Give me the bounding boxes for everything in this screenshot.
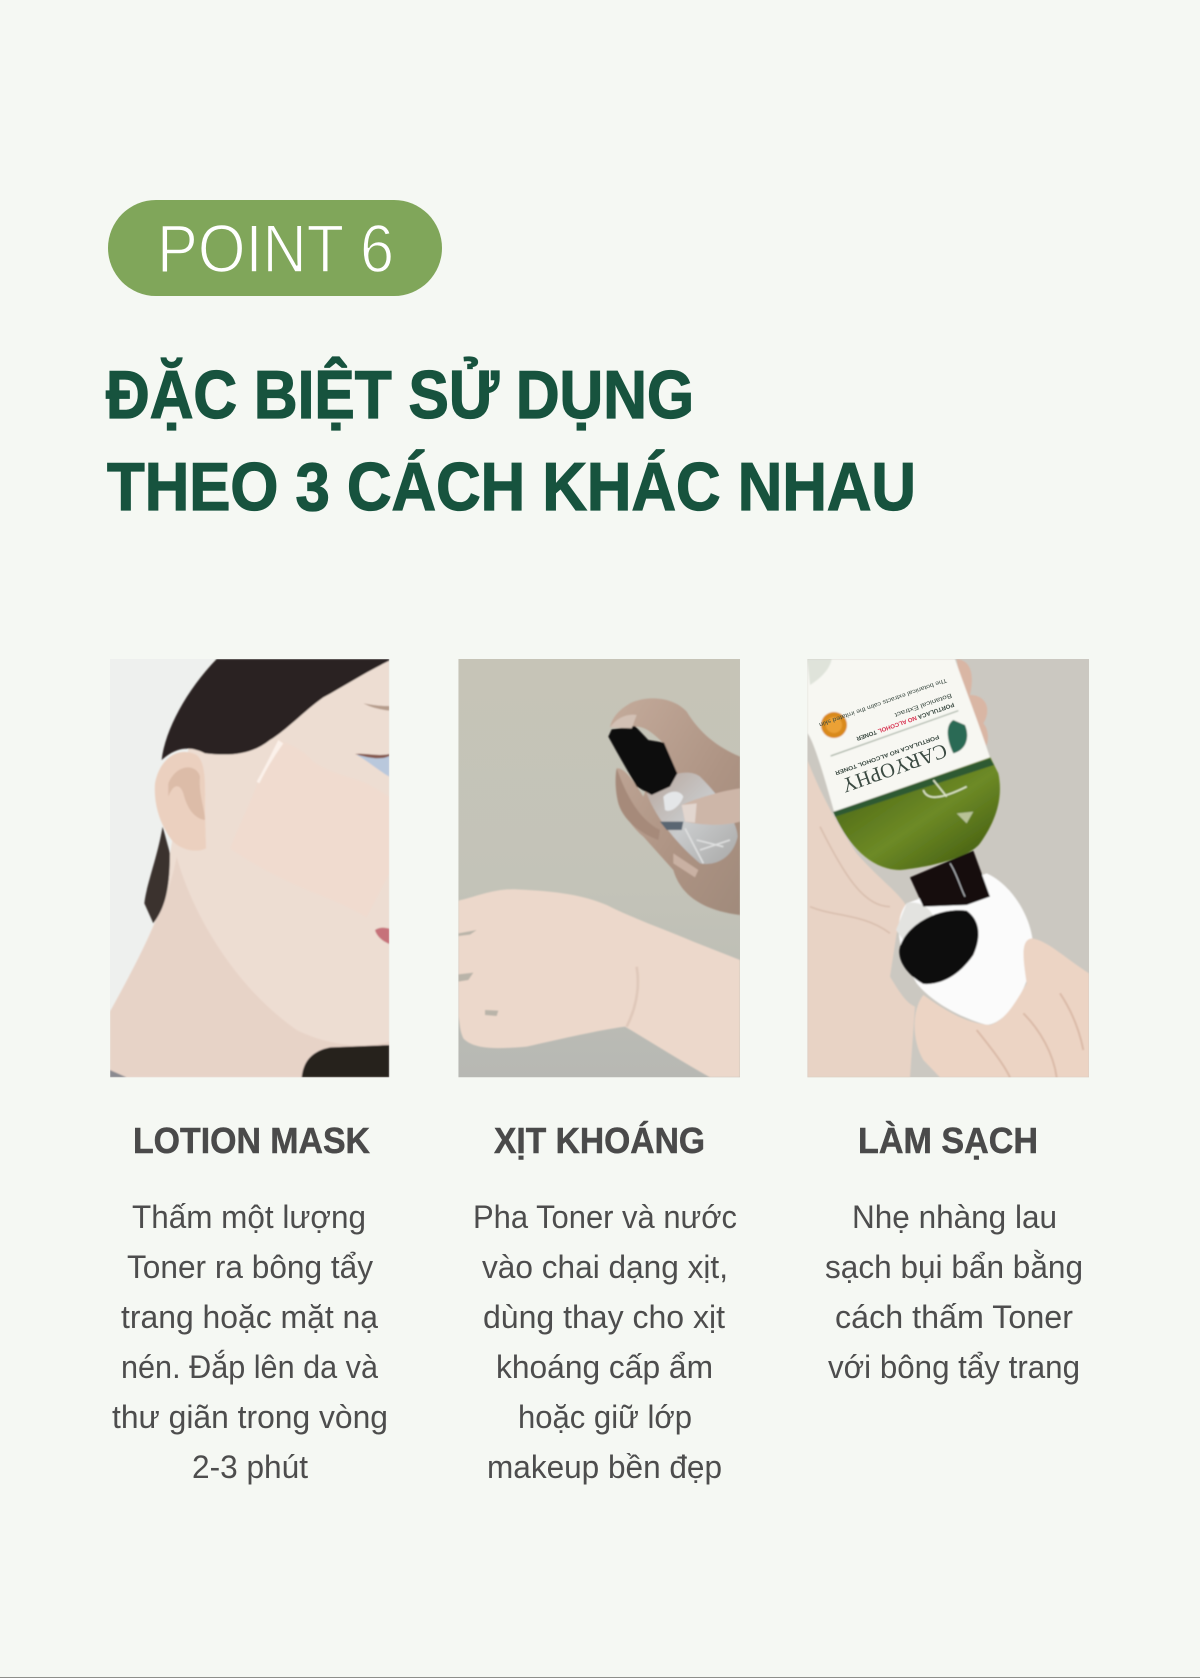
column: mineral mist: khoáng cấp ẩm [496, 1349, 713, 1385]
bottle label text [818, 676, 955, 796]
cap [910, 851, 990, 907]
title: ĐẶC BIỆT SỬ DỤNG [106, 356, 694, 433]
bottle label text: The botanical extracts calm the irritated skin [818, 676, 947, 727]
bottle body [833, 757, 1000, 870]
column: mineral mist: hoặc giữ lớp [518, 1399, 692, 1435]
badge: POINT 6: POINT 6 [157, 211, 394, 287]
cotton pad [899, 873, 1033, 1025]
front fingers [682, 788, 740, 825]
column: lotion mask: nén. Đắp lên da và [121, 1349, 378, 1385]
column: lotion mask [112, 1120, 388, 1485]
column: cleansing: Nhẹ nhàng lau [852, 1199, 1057, 1235]
column: cleansing: LÀM SẠCH [858, 1120, 1038, 1161]
bottle [647, 773, 738, 864]
bottle label text: PORTULACA NO ALCOHOL TONER [855, 701, 955, 741]
column: cleansing: với bông tẩy trang [828, 1349, 1080, 1385]
column: lotion mask: thư giãn trong vòng [112, 1399, 388, 1435]
column: cleansing [825, 1120, 1083, 1385]
photo: toner on cotton pad [807, 659, 1089, 1077]
badge: POINT 6 [108, 200, 442, 296]
column: mineral mist: Pha Toner và nước [473, 1199, 737, 1235]
photo: spraying mist on hand [458, 659, 740, 1077]
column: mineral mist: dùng thay cho xịt [483, 1299, 725, 1335]
pump [608, 726, 677, 795]
label [807, 659, 990, 812]
column: mineral mist: makeup bền đẹp [487, 1449, 722, 1485]
lid [899, 910, 978, 984]
holding hand [807, 760, 915, 1077]
column: lotion mask: Thấm một lượng [132, 1199, 366, 1235]
column: lotion mask: LOTION MASK [133, 1120, 370, 1161]
column: lotion mask: trang hoặc mặt nạ [121, 1299, 378, 1335]
photo: lotion mask on face [110, 659, 389, 1077]
title: THEO 3 CÁCH KHÁC NHAU [107, 449, 916, 525]
column: mineral mist [473, 1120, 737, 1485]
column: cleansing: sạch bụi bẩn bằng [825, 1249, 1083, 1285]
bottle label text: PORTULACA NO ALCOHOL TONER [834, 733, 940, 775]
column: lotion mask: 2-3 phút [192, 1449, 308, 1485]
column: lotion mask: Toner ra bông tẩy [127, 1249, 373, 1285]
column: mineral mist: vào chai dạng xịt, [482, 1249, 728, 1285]
lower arm [458, 889, 740, 1077]
column: mineral mist: XỊT KHOÁNG [494, 1120, 705, 1161]
upper hand [610, 698, 740, 915]
lower hand [915, 938, 1089, 1077]
title [106, 356, 916, 525]
column: cleansing: cách thấm Toner [835, 1299, 1073, 1335]
bottle label text: CARYOPHY [839, 739, 950, 796]
bottle label text: Botanical Extract [893, 691, 953, 718]
